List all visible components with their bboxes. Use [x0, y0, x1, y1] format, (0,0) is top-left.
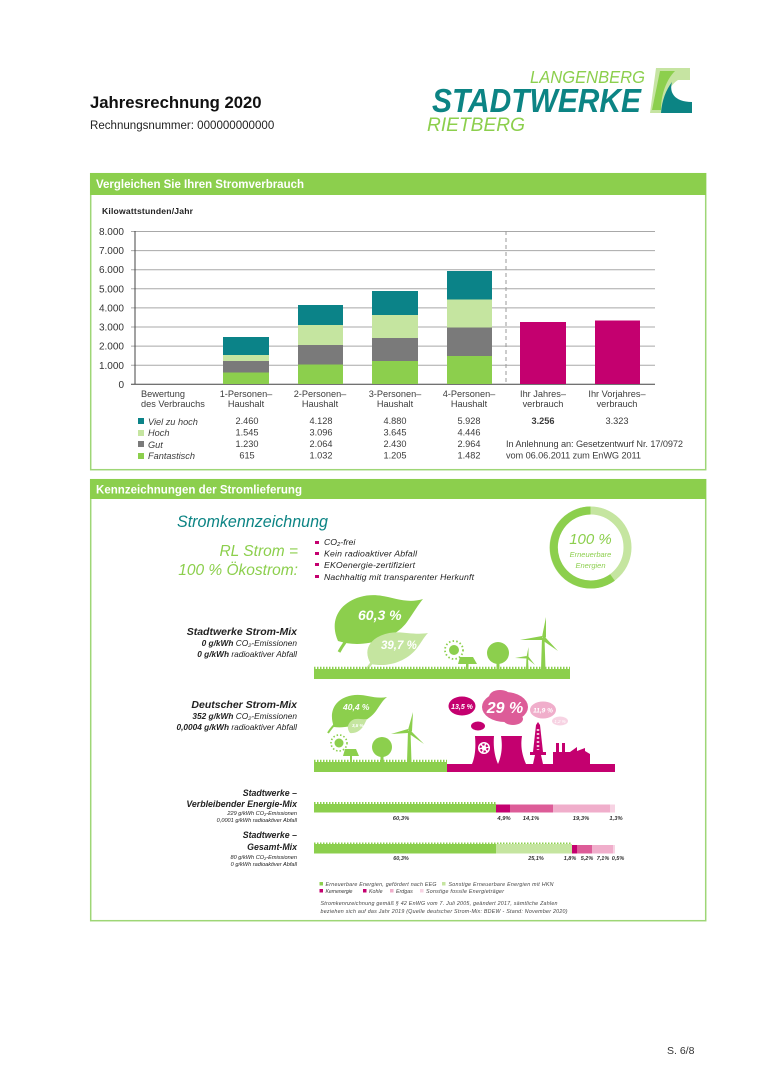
data table: 1.230	[236, 439, 258, 449]
data table: 3.645	[384, 428, 406, 438]
icon: leaf 40.4 percent	[328, 695, 387, 733]
y axis labels: 5.000	[99, 284, 124, 296]
column headings: Ihr Vorjahres–	[588, 389, 646, 399]
legend: energy sources: Kernenergie	[326, 889, 353, 895]
column headings: verbrauch	[523, 399, 563, 409]
legend: consumption rating: Viel zu hoch	[148, 417, 198, 427]
text: total mix: Gesamt-Mix	[247, 842, 298, 852]
bullet list: EKOenergie-zertifiziert	[324, 560, 416, 570]
icon: small wind turbine	[515, 647, 535, 669]
data table: 2.964	[458, 439, 480, 449]
title: Jahresrechnung 2020	[90, 93, 262, 112]
stacked bar: total mix: 60,3%	[393, 856, 409, 862]
bar chart	[99, 227, 655, 391]
text: total mix: Stadtwerke –	[243, 830, 297, 840]
column headings: 1-Personen–	[220, 389, 273, 399]
column headings: Haushalt	[451, 399, 488, 409]
bar: your previous-year consumption	[595, 320, 640, 384]
legend: energy sources: Sonstige Erneuerbare Energien mit HKN	[448, 882, 554, 888]
bullet list: Kein radioaktiver Abfall	[324, 548, 418, 558]
y axis labels: 3.000	[99, 322, 124, 334]
footnote: Stromkennzeichnung gemäß § 42 EnWG vom 7. Juli 2005, geändert 2017, sämtliche Zahlen	[320, 901, 558, 907]
bar: 1-person household	[223, 337, 269, 384]
stacked bar: remaining energy mix: 4,9%	[496, 816, 511, 822]
icon: sun	[445, 641, 463, 659]
column headings: verbrauch	[597, 399, 637, 409]
text: German mix: 0,0004 g/kWh radioaktiver Abfall	[176, 722, 298, 732]
column headings: 3-Personen–	[369, 389, 422, 399]
panel: electricity consumption comparison	[90, 173, 706, 470]
legend: consumption rating	[138, 417, 198, 461]
y axis labels: 0	[118, 380, 124, 391]
legend: energy sources: Erdgas	[396, 889, 413, 895]
donut: 100 percent renewable: Erneuerbare	[570, 550, 611, 559]
data table: 4.128	[310, 416, 332, 426]
stacked bar: total mix	[314, 844, 624, 862]
data table: 5.928	[458, 416, 480, 426]
text: total mix: 0 g/kWh radioaktiver Abfall	[231, 862, 298, 868]
panel heading	[90, 173, 706, 195]
claim: RL Strom: 100 % Ökostrom:	[178, 561, 298, 579]
text: total mix: 80 g/kWh CO₂-Emissionen	[231, 855, 297, 861]
donut: 100 percent renewable	[554, 510, 628, 584]
data table	[236, 416, 628, 460]
text: remaining energy mix: 229 g/kWh CO₂-Emissionen	[226, 811, 297, 817]
data table: 1.482	[458, 450, 480, 460]
icon: tree	[372, 737, 392, 762]
icon: large wind turbine	[520, 617, 558, 669]
panel heading: Kennzeichnungen der Stromlieferung	[96, 484, 302, 496]
column headings: Haushalt	[302, 399, 339, 409]
axis title: Kilowattstunden/Jahr	[102, 206, 194, 216]
y axis labels: 6.000	[99, 265, 124, 276]
logo: Stadtwerke Rietberg Langenberg: STADTWERKE	[432, 82, 642, 119]
icon: cooling tower	[498, 736, 526, 764]
donut: 100 percent renewable: 100 %	[569, 531, 612, 548]
data table: 1.032	[310, 450, 332, 460]
illustration: German mix landscape	[314, 690, 615, 772]
data table: 1.545	[236, 428, 258, 438]
icon: cloud 13.5 percent: 13,5 %	[451, 704, 474, 711]
legend: energy sources: Kohle	[369, 889, 383, 895]
footnote	[320, 901, 568, 915]
column headings: 2-Personen–	[294, 389, 347, 399]
data table: 2.430	[384, 439, 406, 449]
ground	[314, 761, 615, 772]
y axis labels: 8.000	[99, 227, 124, 238]
section title: Stromkennzeichnung	[177, 513, 329, 531]
data table: 2.064	[310, 439, 332, 449]
source note	[506, 439, 683, 460]
icon: small leaf 39.7 percent: 39,7 %	[381, 640, 417, 652]
y axis labels: 1.000	[99, 361, 124, 372]
icon: cloud 29 percent: 29 %	[486, 700, 523, 717]
text: Stadtwerke mix: 0 g/kWh CO₂-Emissionen	[202, 638, 297, 648]
icon: large leaf 60.3 percent: 60,3 %	[358, 607, 402, 623]
page number: S. 6/8	[667, 1045, 695, 1057]
column headings: des Verbrauchs	[141, 399, 205, 409]
bar: your annual consumption	[520, 322, 566, 384]
legend: energy sources: Sonstige fossile Energieträger	[426, 889, 504, 895]
claim: RL Strom: RL Strom =	[219, 543, 298, 560]
y axis labels: 7.000	[99, 246, 124, 257]
illustration: Stadtwerke mix landscape	[314, 595, 570, 679]
invoice number: Rechnungsnummer: 000000000000	[90, 120, 274, 132]
icon: large leaf 60.3 percent	[335, 595, 423, 652]
bullet list: CO₂-frei	[324, 537, 356, 547]
legend: consumption rating: Gut	[148, 440, 163, 450]
icon: wind turbine	[391, 712, 424, 762]
panel: electricity labelling	[90, 479, 706, 921]
text: total mix	[231, 830, 298, 868]
bullet list: Nachhaltig mit transparenter Herkunft	[324, 572, 475, 582]
text: remaining energy mix: Verbleibender Energie-Mix	[186, 799, 298, 809]
data table: 4.446	[458, 428, 480, 438]
data table: 1.205	[384, 450, 406, 460]
data table: 3.323	[606, 416, 628, 426]
data table: 3.096	[310, 428, 332, 438]
icon: oil derrick	[530, 722, 546, 764]
stacked bar: total mix: 1,8%	[564, 856, 576, 862]
text: remaining energy mix: 0,0001 g/kWh radioaktiver Abfall	[217, 818, 298, 824]
icon: sun	[331, 735, 347, 751]
column headings: 4-Personen–	[443, 389, 496, 399]
column headings: Bewertung	[141, 389, 185, 399]
icon: cloud 11.9 percent	[530, 702, 556, 718]
stacked bar: remaining energy mix: 19,3%	[573, 816, 589, 822]
stacked bar: total mix: 25,1%	[527, 856, 544, 862]
icon: solar panel	[343, 749, 359, 762]
source note: In Anlehnung an: Gesetzentwurf Nr. 17/0972	[506, 439, 683, 449]
icon: tree	[487, 642, 509, 669]
data table: 2.460	[236, 416, 258, 426]
bullet list	[315, 537, 475, 582]
data table: 3.256	[532, 416, 554, 426]
icon: small leaf	[348, 719, 367, 733]
legend: consumption rating: Hoch	[148, 428, 169, 438]
text: Stadtwerke mix	[187, 626, 298, 659]
bar: 3-person household	[372, 291, 418, 384]
panel heading	[90, 479, 706, 499]
ground	[314, 668, 570, 679]
text: Stadtwerke mix: 0 g/kWh radioaktiver Abfall	[197, 649, 298, 659]
bar: 2-person household	[298, 305, 343, 384]
y axis labels: 2.000	[99, 342, 124, 352]
icon: small leaf 39.7 percent	[366, 632, 428, 671]
text: remaining energy mix	[186, 788, 298, 824]
icon: cloud 11.9 percent: 11,9 %	[533, 708, 553, 714]
stacked bar: total mix: 7,1%	[597, 856, 609, 862]
y axis labels	[99, 227, 124, 391]
stacked bar: remaining energy mix: 14,1%	[523, 816, 539, 822]
bar: 4-person household	[447, 271, 492, 384]
column headings: Haushalt	[377, 399, 414, 409]
data table: 615	[239, 450, 255, 460]
legend: consumption rating: Fantastisch	[148, 451, 195, 461]
icon: cloud 29 percent	[482, 690, 528, 725]
column headings: Haushalt	[228, 399, 265, 409]
column headings: Ihr Jahres–	[520, 389, 567, 399]
donut: 100 percent renewable: Energien	[575, 561, 606, 570]
logo: Stadtwerke Rietberg Langenberg: RIETBERG	[427, 114, 525, 136]
stacked bar: total mix: 5,2%	[581, 856, 593, 862]
text: German mix: 352 g/kWh CO₂-Emissionen	[192, 711, 297, 721]
y axis labels: 4.000	[99, 304, 124, 314]
text: German mix: Deutscher Strom-Mix	[191, 699, 298, 711]
stacked bar: remaining energy mix: 1,3%	[609, 816, 623, 822]
stacked bar: remaining energy mix: 60,3%	[393, 816, 409, 822]
icon: cloud 13.5 percent	[448, 696, 485, 730]
source note: vom 06.06.2011 zum EnWG 2011	[506, 450, 641, 460]
text: German mix	[176, 699, 298, 732]
column headings	[141, 389, 646, 409]
legend: energy sources: Erneuerbare Energien, gefördert nach EEG	[326, 882, 436, 888]
icon: small leaf: 3,5 %	[352, 723, 364, 728]
stacked bar: remaining energy mix	[314, 803, 623, 822]
icon: cloud small: 1,2 %	[554, 719, 566, 724]
text: Stadtwerke mix: Stadtwerke Strom-Mix	[187, 626, 298, 638]
icon: solar panel	[458, 657, 477, 669]
icon: leaf 40.4 percent: 40,4 %	[342, 702, 370, 712]
logo: Stadtwerke Rietberg Langenberg: LANGENBERG	[530, 67, 645, 87]
text: remaining energy mix: Stadtwerke –	[243, 788, 297, 798]
panel heading: Vergleichen Sie Ihren Stromverbrauch	[96, 179, 304, 191]
claim: RL Strom	[178, 543, 298, 579]
footnote: beziehen sich auf das Jahr 2019 (Quelle deutscher Strom-Mix: BDEW - Stand: November 2020)	[320, 909, 568, 915]
legend: energy sources	[320, 882, 554, 895]
icon: factory	[553, 743, 590, 764]
stacked bar: total mix: 0,5%	[612, 856, 624, 862]
data table: 4.880	[384, 416, 406, 426]
icon: cloud small	[552, 716, 568, 726]
icon: nuclear cooling tower	[472, 736, 498, 764]
logo: Stadtwerke Rietberg Langenberg	[427, 67, 692, 136]
